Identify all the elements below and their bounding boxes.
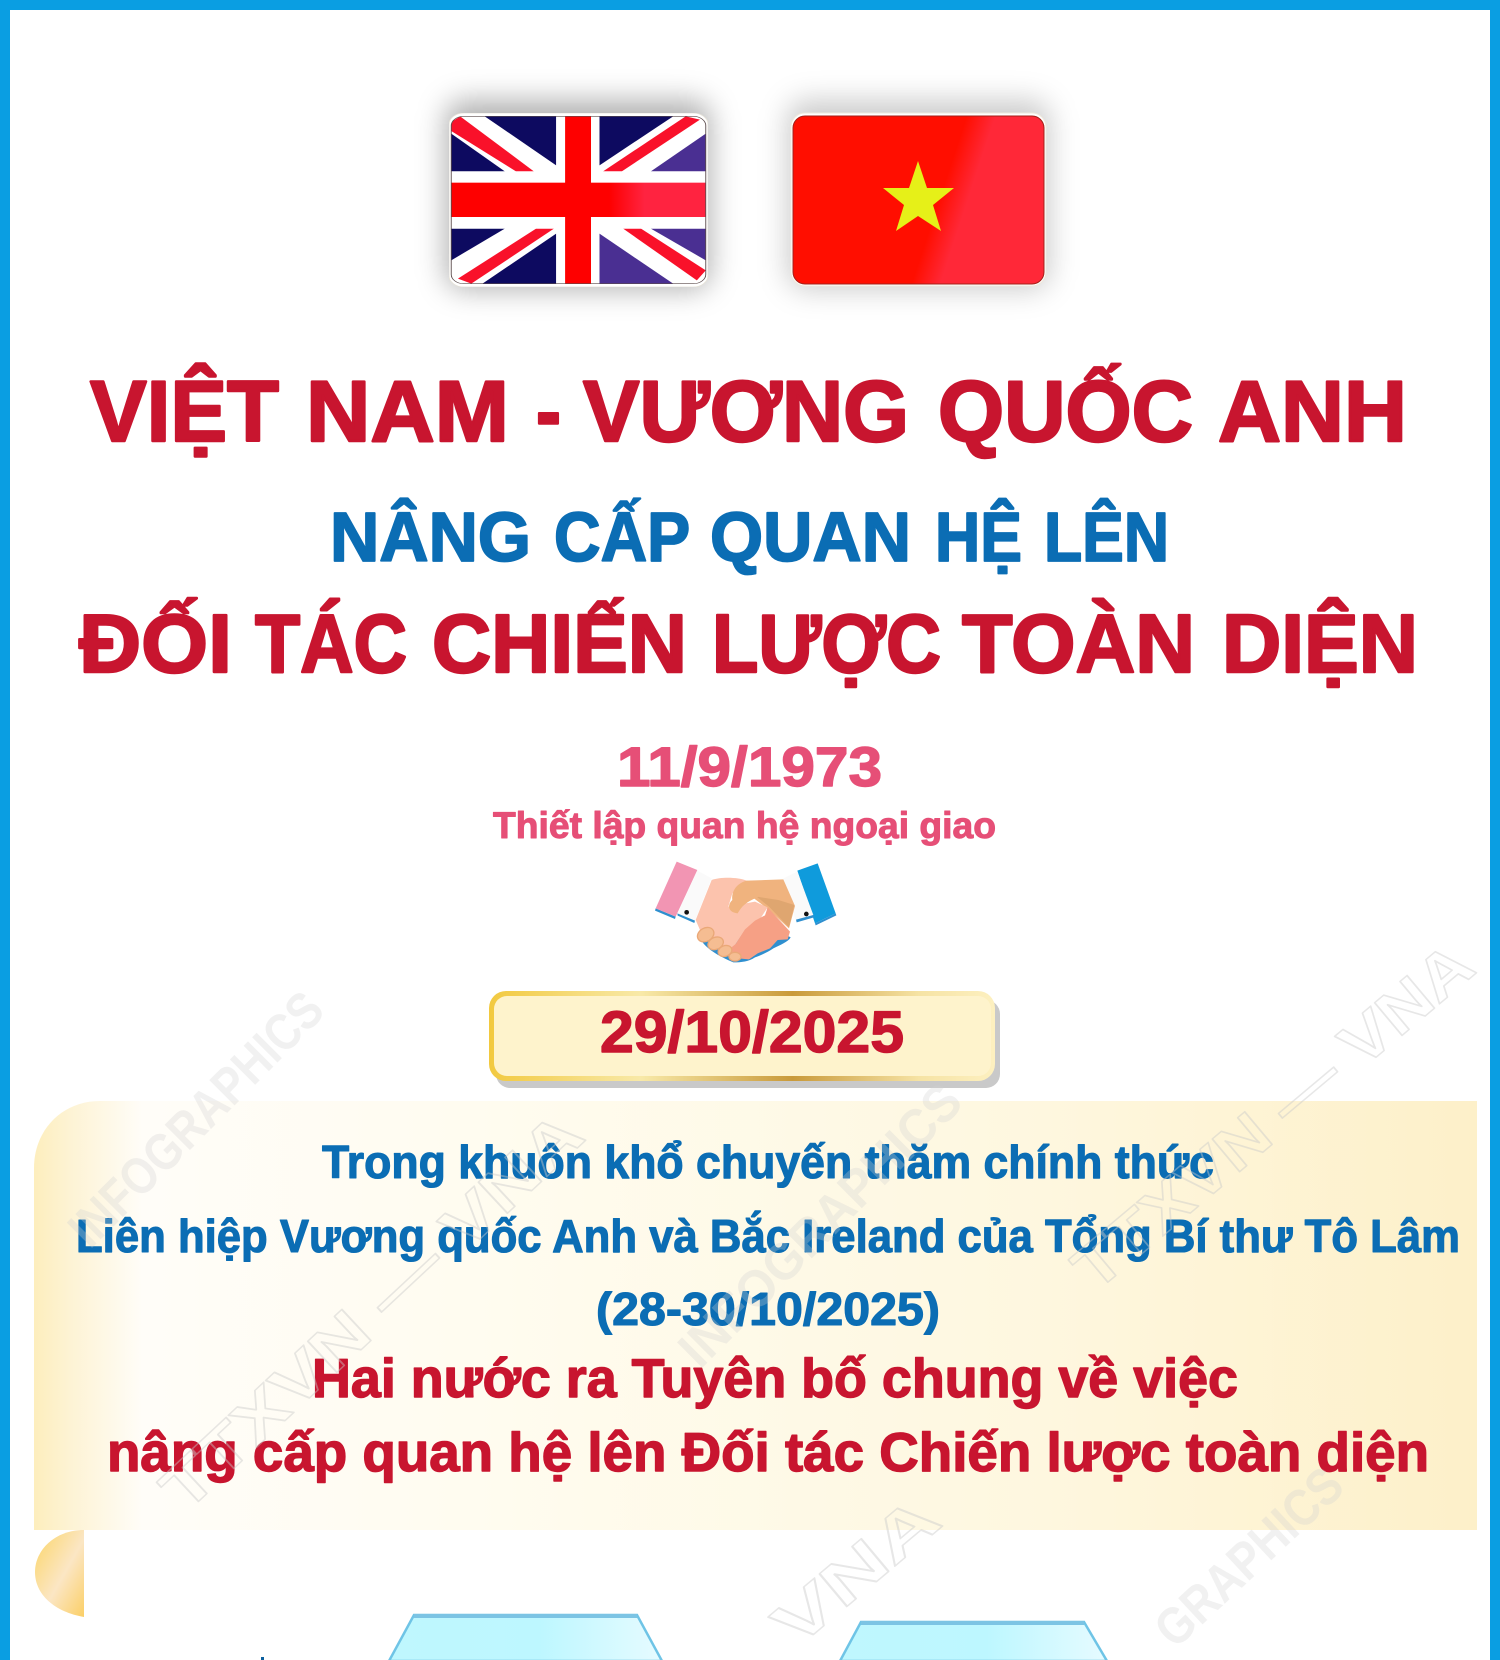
title: Việt Nam - Vương quốc Anh: ANH	[1218, 364, 1407, 460]
scroll curl	[35, 1530, 84, 1617]
line: framing sentence 1: Trong khuôn khổ chuyến thăm chính thức	[322, 1136, 1214, 1188]
subtitle: nâng cấp quan hệ lên: QUAN	[710, 498, 911, 576]
date box: 29/10/2025	[489, 991, 1000, 1088]
caption: thiết lập quan hệ ngoại giao: Thiết lập quan hệ ngoại giao	[493, 805, 996, 846]
line: joint statement 2: nâng cấp quan hệ lên Đối tác Chiến lược toàn diện	[107, 1421, 1429, 1483]
flag: United Kingdom	[445, 100, 711, 290]
watermarks: TTXVN — VNA	[1060, 929, 1487, 1304]
small mark at bottom edge	[261, 1657, 264, 1660]
watermarks: GRAPHICS	[1144, 1456, 1355, 1659]
title: Việt Nam - Vương quốc Anh: QUỐC	[938, 364, 1193, 460]
line: joint statement 1: Hai nước ra Tuyên bố chung về việc	[312, 1347, 1238, 1409]
subtitle: nâng cấp quan hệ lên: NÂNG	[330, 497, 531, 576]
title: Việt Nam - Vương quốc Anh: VƯƠNG	[583, 364, 909, 460]
title: Việt Nam - Vương quốc Anh: VIỆT	[90, 364, 279, 460]
watermarks: TTXVN — VNA	[147, 1099, 597, 1524]
panel: announcement	[34, 1101, 1477, 1617]
subtitle: đối tác chiến lược toàn diện: CHIẾN	[432, 597, 687, 690]
icon: handshake	[655, 862, 836, 962]
line: visit dates: (28-30/10/2025)	[596, 1283, 940, 1335]
line: framing sentence 2: Liên hiệp Vương quốc Anh và Bắc Ireland của Tổng Bí thư Tô Lâm	[76, 1210, 1460, 1262]
subtitle: nâng cấp quan hệ lên: LÊN	[1044, 497, 1169, 576]
watermarks: VNA	[760, 1483, 953, 1660]
date: 11/9/1973: 11/9/1973	[617, 735, 882, 798]
subtitle: đối tác chiến lược toàn diện: TÁC	[255, 597, 407, 690]
subtitle: nâng cấp quan hệ lên: CẤP	[554, 498, 689, 576]
panel background	[34, 1101, 1477, 1530]
subtitle: đối tác chiến lược toàn diện: DIỆN	[1222, 597, 1418, 690]
watermarks: INFOGRAPHICS	[57, 981, 335, 1258]
watermarks	[57, 929, 1487, 1660]
subtitle: đối tác chiến lược toàn diện: LƯỢC	[712, 597, 941, 690]
hexagon card 2 (top edge)	[840, 1621, 1107, 1660]
watermarks: INFOGRAPHICS	[667, 1072, 974, 1378]
title: Việt Nam - Vương quốc Anh: -	[536, 364, 561, 460]
hexagon card 1 (top edge)	[389, 1614, 662, 1660]
subtitle: đối tác chiến lược toàn diện: TOÀN	[962, 597, 1195, 690]
subtitle: đối tác chiến lược toàn diện: ĐỐI	[79, 597, 232, 690]
date box: 29/10/2025: 29/10/2025	[600, 1000, 904, 1065]
flag: Vietnam	[787, 100, 1050, 290]
subtitle: nâng cấp quan hệ lên: HỆ	[935, 497, 1022, 576]
title: Việt Nam - Vương quốc Anh: NAM	[306, 364, 509, 460]
